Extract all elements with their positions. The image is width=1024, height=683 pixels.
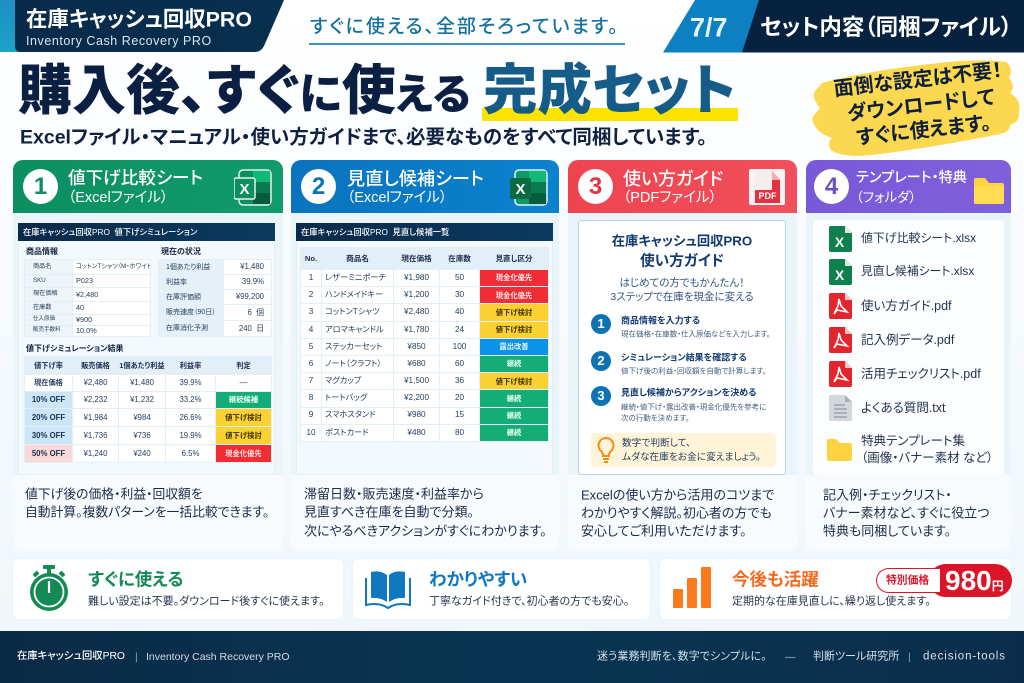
main title: 購入後、すぐに使える — [18, 61, 471, 121]
candidates table: 在庫数 — [448, 254, 471, 263]
simulation table: ¥984 — [133, 413, 151, 422]
file item: bonus templates folder: （画像・バナー素材 など） — [861, 451, 993, 465]
tip box: ムダな在庫をお金に変えましょう。 — [622, 452, 761, 463]
panel: card 2 review candidates sheet — [291, 160, 559, 551]
file item: review candidates xlsx: 見直し候補シート.xlsx — [861, 264, 974, 278]
candidates table: 20 — [455, 393, 464, 402]
card 1 header: 1 — [34, 173, 47, 200]
simulation table: 50% OFF — [32, 449, 65, 458]
current status table — [158, 259, 272, 337]
file item: bonus templates folder — [827, 434, 993, 465]
step 3: 3 — [597, 388, 605, 403]
candidates table: 継続 — [507, 428, 521, 437]
simulation table: 19.9% — [179, 431, 202, 440]
file item: review candidates xlsx — [829, 259, 974, 285]
candidates table: 値下げ検討 — [496, 377, 532, 386]
candidates table: ノート（クラフト） — [325, 359, 382, 368]
footer: 判断ツール研究所 — [813, 650, 899, 662]
card 4 description: バナー素材など、すぐに役立つ — [823, 506, 990, 520]
feature: keeps being useful — [660, 559, 1011, 619]
header tagline — [309, 14, 625, 45]
simulation table: ¥736 — [133, 431, 151, 440]
icon: stopwatch — [30, 565, 68, 611]
footer: | — [908, 651, 911, 663]
candidates table: 100 — [453, 342, 466, 351]
card 4 description: 記入例・チェックリスト・ — [823, 488, 952, 502]
candidates table: 5 — [309, 342, 313, 351]
icon: bar chart — [673, 567, 711, 608]
candidates table: ¥2,480 — [404, 307, 429, 316]
candidates table — [300, 247, 549, 442]
current status table: 販売速度（90日） — [166, 309, 216, 316]
card 3 description: わかりやすく解説。初心者の方でも — [581, 506, 772, 520]
card 3 description: Excelの使い方から活用のコツまで — [581, 488, 774, 502]
simulation table: 20% OFF — [32, 413, 65, 422]
candidates table: 値下げ検討 — [496, 308, 532, 317]
simulation table: 値下げ検討 — [225, 431, 262, 440]
candidates table: レザーミニポーチ — [325, 273, 386, 282]
sheet title bar — [296, 223, 553, 241]
footer: 迷う業務判断を、数字でシンプルに。 — [597, 650, 767, 662]
product info table: 40 — [76, 303, 84, 312]
icon: open book — [365, 571, 411, 610]
product info table: 仕入原価 — [33, 316, 55, 322]
card 4 description — [806, 475, 1011, 551]
current status table: 39.9% — [242, 277, 264, 286]
guide title: 在庫キャッシュ回収PRO — [612, 233, 752, 248]
card 4 header: （フォルダ） — [856, 190, 916, 205]
file item: sample data pdf — [829, 327, 954, 353]
subtitle: Excelファイル・マニュアル・使い方ガイドまで、必要なものをすべて同梱しています。 — [20, 126, 707, 148]
icon: light bulb — [598, 437, 614, 463]
product info table: 商品名 — [33, 263, 52, 270]
footer: | — [135, 651, 138, 663]
card 2 header: 見直し候補シート — [347, 169, 484, 189]
header: set contents tab: 7/7 — [690, 12, 728, 42]
current status table: ¥1,480 — [240, 262, 264, 271]
candidates table: トートバッグ — [325, 393, 367, 402]
candidates table: 40 — [455, 307, 464, 316]
simulation table: ¥240 — [133, 449, 151, 458]
simulation table: — — [240, 378, 247, 387]
feature: keeps being useful: 今後も活躍 — [732, 569, 819, 589]
candidates table: 1 — [309, 273, 313, 282]
candidates table: ¥1,200 — [404, 290, 429, 299]
candidates table: 7 — [309, 376, 313, 385]
file item: checklist pdf — [829, 361, 981, 387]
simulation table: ¥1,480 — [130, 378, 154, 387]
footer: decision-tools — [923, 650, 1006, 662]
simulation table: 現金化優先 — [225, 449, 262, 458]
file item: faq txt — [829, 395, 946, 421]
simulation table: 26.6% — [179, 413, 202, 422]
candidates table: 値下げ検討 — [496, 325, 532, 334]
callout: no setup needed brush badge: ダウンロードして — [846, 87, 996, 125]
panel: card 4 templates and bonus — [806, 160, 1011, 551]
simulation table: ¥2,480 — [84, 378, 107, 387]
candidates table: 継続 — [507, 359, 521, 368]
candidates table: 現金化優先 — [496, 273, 532, 282]
file item: price comparison xlsx: 値下げ比較シート.xlsx — [861, 231, 976, 245]
candidates table: ポストカード — [325, 428, 369, 437]
header tagline: すぐに使える、全部そろっています。 — [310, 16, 620, 38]
sheet preview panel — [18, 223, 275, 475]
simulation table: 利益率 — [180, 361, 201, 370]
simulation table: ¥2,232 — [84, 395, 107, 404]
candidates table: 現金化優先 — [496, 291, 532, 300]
file item: guide pdf: 使い方ガイド.pdf — [861, 299, 952, 313]
card 1 header: X — [239, 181, 250, 198]
step 3 — [591, 386, 766, 422]
simulation table: 30% OFF — [32, 431, 65, 440]
panel: card 3 usage guide — [568, 160, 797, 551]
candidates table: ¥1,980 — [404, 273, 429, 282]
card 1 header: （Excelファイル） — [68, 190, 168, 206]
product info table: ¥900 — [76, 315, 92, 324]
main title: 完成セット — [483, 60, 736, 121]
product info table: 10.0% — [76, 326, 97, 335]
card 1 description: 値下げ後の価格・利益・回収額を — [25, 487, 203, 502]
simulation table: 値下げ検討 — [225, 413, 262, 422]
card 3 description: 安心してご利用いただけます。 — [581, 524, 746, 538]
simulation table: 継続候補 — [229, 395, 258, 404]
candidates table: ¥980 — [407, 410, 426, 419]
callout: no setup needed brush badge: すぐに使えます。 — [855, 112, 992, 149]
candidates table: 6 — [309, 359, 313, 368]
simulation table: 判定 — [236, 361, 251, 370]
current status table: 1個あたり利益 — [166, 264, 210, 270]
sheet title bar — [18, 223, 275, 241]
feature: ready to use — [13, 559, 343, 619]
candidates table: 2 — [309, 290, 313, 299]
feature: ready to use: すぐに使える — [88, 569, 184, 589]
candidates table: ハンドメイドキー — [325, 290, 383, 299]
candidates table: 9 — [309, 410, 313, 419]
header: set contents tab: セット内容（同梱ファイル） — [760, 15, 1012, 40]
card 2 header: 2 — [312, 173, 325, 200]
candidates table: 60 — [455, 359, 464, 368]
card 4 header — [806, 160, 1011, 213]
product info table — [24, 259, 151, 337]
feature: keeps being useful: 定期的な在庫見直しに、繰り返し使えます。 — [732, 596, 931, 608]
step 3: 継続・値下げ・露出改善・現金化優先を参考に — [621, 402, 766, 411]
price badge: 980円 — [945, 565, 1004, 596]
guide document — [578, 220, 786, 475]
simulation table: ¥1,240 — [84, 449, 107, 458]
candidates table: 商品名 — [346, 254, 369, 263]
card 1 description — [13, 475, 283, 551]
footer: 在庫キャッシュ回収PRO — [17, 651, 125, 662]
card 3 description — [568, 475, 797, 551]
candidates table: スマホスタンド — [325, 410, 376, 419]
candidates table: 80 — [455, 428, 464, 437]
price badge — [876, 564, 1012, 597]
current status heading: 現在の状況 — [161, 247, 201, 256]
simulation table: 販売価格 — [81, 361, 110, 370]
card 1 header — [13, 160, 283, 213]
footer — [0, 631, 1024, 683]
card 2 header: X — [515, 181, 526, 198]
card 4 header: 4 — [825, 173, 838, 200]
candidates table: コットンTシャツ — [325, 307, 380, 316]
card 3 header — [568, 160, 797, 213]
product info table: SKU — [33, 277, 46, 284]
card 4 header: テンプレート・特典 — [856, 170, 967, 186]
file item: price comparison xlsx — [829, 226, 976, 252]
current status table: 在庫評価額 — [166, 294, 201, 300]
step 1 — [591, 314, 770, 338]
feature: easy to understand: 丁寧なガイド付きで、初心者の方でも安心。 — [429, 596, 629, 608]
candidates table: ステッカーセット — [325, 342, 382, 351]
header: left brand tab — [0, 0, 284, 52]
main title — [18, 60, 738, 121]
current status table: 6 個 — [248, 308, 264, 317]
candidates table: ¥1,780 — [404, 325, 429, 334]
candidates table: 見直し区分 — [495, 254, 533, 263]
product info table: 現在価格 — [33, 290, 58, 297]
simulation table: 33.2% — [179, 395, 202, 404]
feature: ready to use: 難しい設定は不要。ダウンロード後すぐに使えます。 — [88, 596, 324, 608]
simulation table — [24, 356, 272, 463]
card 2 description: 見直すべき在庫を自動で分類。 — [304, 504, 474, 520]
step 1: 現在価格・在庫数・仕入原価などを入力します。 — [621, 329, 770, 338]
feature: easy to understand: わかりやすい — [429, 569, 527, 589]
footer: Inventory Cash Recovery PRO — [146, 651, 290, 663]
candidates table: 露出改善 — [499, 342, 529, 351]
step 2 — [591, 351, 766, 375]
product info table: 販売手数料 — [33, 327, 61, 333]
guide document: 使い方ガイド — [640, 254, 724, 270]
sheet title bar: 在庫キャッシュ回収PRO 値下げシミュレーション — [23, 227, 197, 237]
candidates table: 4 — [309, 325, 313, 334]
card 2 header: （Excelファイル） — [347, 190, 447, 206]
step 2: シミュレーション結果を確認する — [621, 352, 747, 362]
guide intro: はじめての方でもかんたん！ — [619, 277, 745, 289]
candidates table: 10 — [306, 428, 316, 437]
callout: no setup needed brush badge: 面倒な設定は不要！ — [833, 60, 1003, 101]
sheet preview panel — [296, 223, 553, 475]
candidates table: マグカップ — [325, 376, 361, 385]
step 2: 値下げ後の利益・回収額を自動で計算します。 — [621, 366, 766, 375]
candidates table: 継続 — [507, 411, 521, 420]
candidates table: ¥1,500 — [404, 376, 429, 385]
candidates table: 継続 — [507, 394, 521, 403]
file item: sample data pdf: 記入例データ.pdf — [861, 333, 954, 347]
step 1: 商品情報を入力する — [621, 316, 700, 326]
guide document: 3ステップで在庫を現金に変える — [610, 291, 754, 303]
callout: no setup needed brush badge — [812, 60, 1020, 156]
candidates table: アロマキャンドル — [325, 325, 384, 334]
simulation table: 現在価格 — [34, 378, 63, 387]
header: set contents tab — [663, 0, 1024, 52]
feature: easy to understand — [353, 559, 650, 619]
simulation table: ¥1,736 — [84, 431, 107, 440]
candidates table: 24 — [455, 325, 464, 334]
footer: — — [785, 651, 796, 663]
simulation heading: 値下げシミュレーション結果 — [26, 344, 124, 353]
file item: bonus templates folder: 特典テンプレート集 — [861, 434, 965, 448]
candidates table: 3 — [309, 307, 313, 316]
panel: card 1 price comparison sheet — [13, 160, 283, 551]
candidates table: 30 — [455, 290, 464, 299]
card 1 description: 自動計算。複数パターンを一括比較できます。 — [25, 505, 269, 520]
tip box — [591, 433, 776, 467]
simulation table: 値下げ率 — [34, 361, 63, 370]
card 3 header: 3 — [589, 173, 602, 200]
file item: review candidates xlsx: X — [835, 267, 845, 283]
sheet title bar: 在庫キャッシュ回収PRO 見直し候補一覧 — [301, 227, 449, 237]
product info table: ¥2,480 — [76, 290, 98, 299]
simulation table: 39.9% — [179, 378, 202, 387]
current status table: 在庫消化予測 — [166, 325, 208, 332]
simulation table: ¥1,232 — [130, 395, 154, 404]
card 2 description — [291, 475, 559, 551]
price badge: 特別価格 — [886, 575, 929, 587]
card 4 description: 特典も同梱しています。 — [823, 524, 951, 538]
simulation table: 6.5% — [182, 449, 199, 458]
simulation table: 10% OFF — [32, 395, 65, 404]
candidates table: 現在価格 — [401, 254, 432, 263]
card 2 header — [291, 160, 559, 213]
candidates table: 15 — [455, 410, 464, 419]
candidates table: ¥850 — [407, 342, 426, 351]
card 3 header: （PDFファイル） — [623, 190, 717, 206]
candidates table: 8 — [309, 393, 313, 402]
step 3: 見直し候補からアクションを決める — [621, 388, 756, 398]
step 1: 1 — [597, 316, 605, 331]
current status table: 利益率 — [166, 278, 187, 286]
simulation table: ¥1,984 — [84, 413, 107, 422]
current status table: 240 日 — [239, 324, 264, 333]
product info table: P023 — [76, 276, 93, 285]
card 3 header: 使い方ガイド — [623, 169, 723, 189]
file item: guide pdf — [829, 293, 952, 319]
candidates table: No. — [305, 254, 317, 263]
candidates table: 50 — [455, 273, 464, 282]
header: left brand tab: 在庫キャッシュ回収PRO — [26, 7, 252, 31]
candidates table: ¥2,200 — [404, 393, 429, 402]
candidates table: ¥480 — [407, 428, 426, 437]
product info table: 在庫数 — [33, 304, 52, 311]
file item: checklist pdf: 活用チェックリスト.pdf — [861, 367, 981, 381]
file item: faq txt: よくある質問.txt — [861, 401, 946, 415]
current status table: ¥99,200 — [236, 292, 264, 301]
header: left brand tab: Inventory Cash Recovery PRO — [26, 34, 212, 48]
card 3 header: PDF — [758, 191, 777, 201]
tip box: 数字で判断して、 — [622, 438, 691, 449]
card 2 description: 次にやるべきアクションがすぐにわかります。 — [304, 524, 547, 538]
step 2: 2 — [597, 353, 605, 368]
card 1 header: 値下げ比較シート — [68, 168, 203, 188]
file item: price comparison xlsx: X — [835, 234, 845, 250]
candidates table: ¥680 — [407, 359, 426, 368]
file list — [813, 220, 1004, 475]
simulation table: 1個あたり利益 — [119, 361, 165, 370]
product info heading: 商品情報 — [26, 247, 58, 256]
candidates table: 36 — [455, 376, 464, 385]
step 3: 次の行動を決めます。 — [621, 413, 689, 422]
card 2 description: 滞留日数・販売速度・利益率から — [304, 486, 484, 502]
